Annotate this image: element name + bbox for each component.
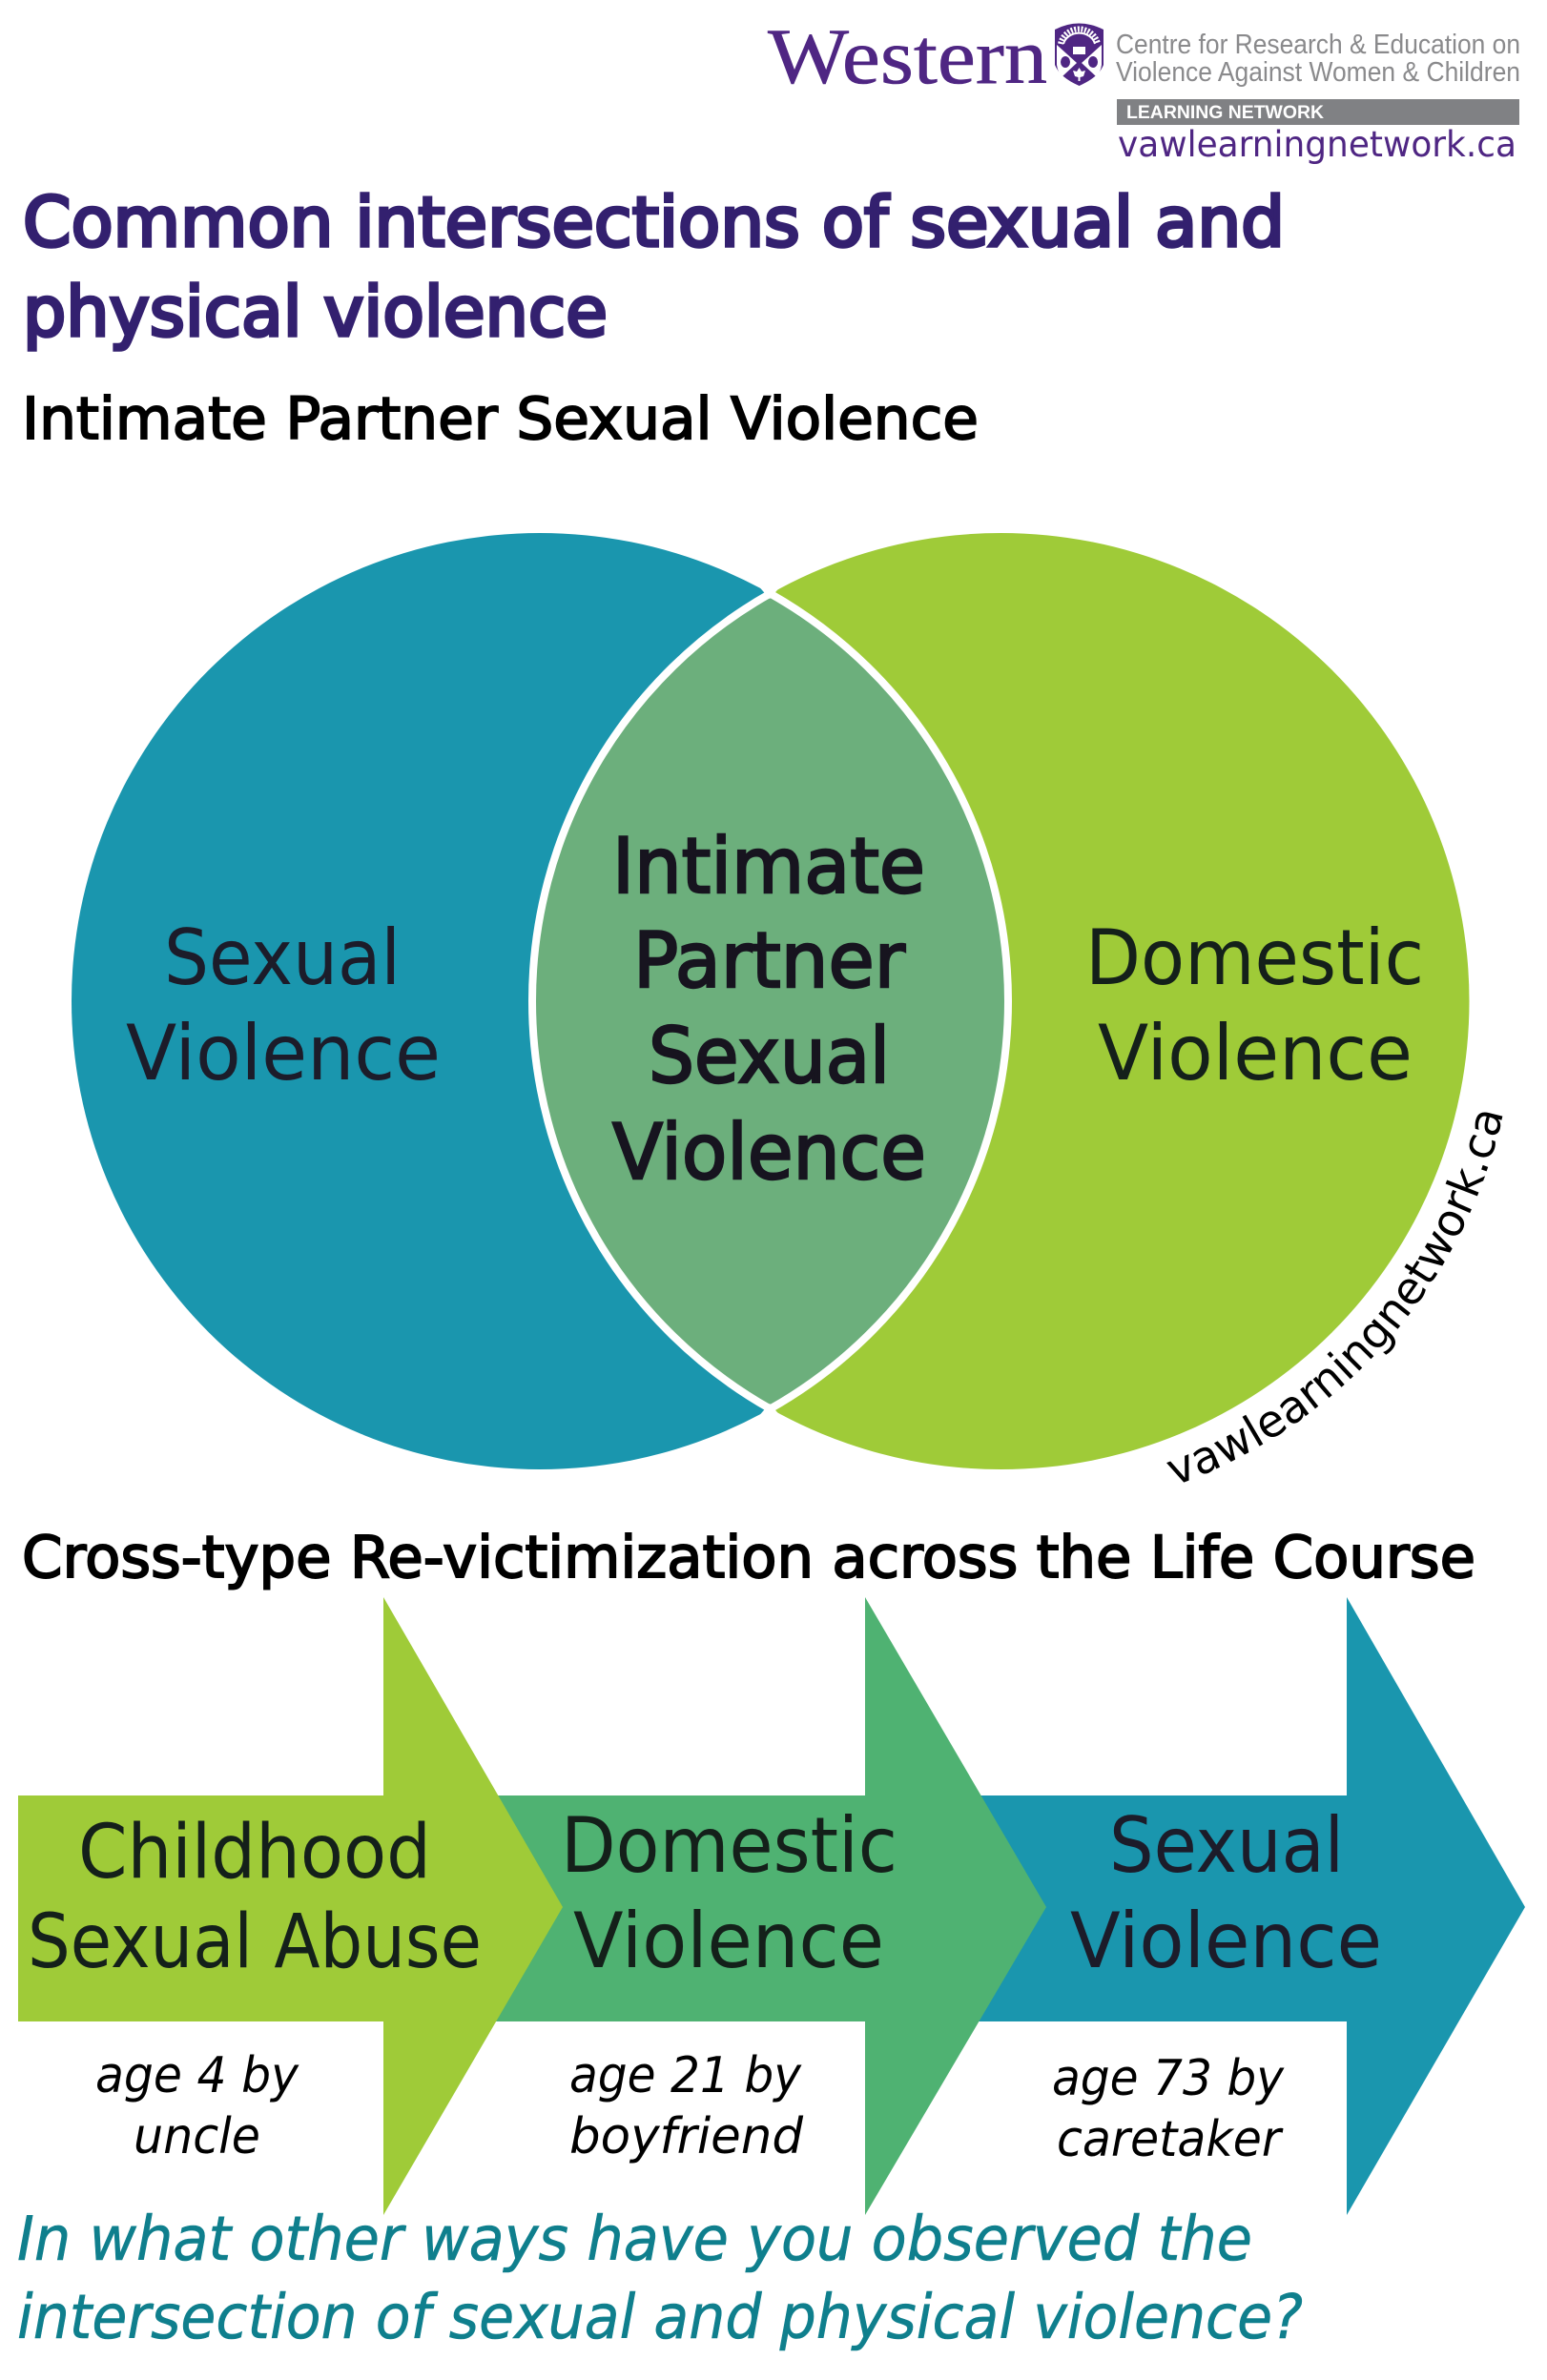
website link: vawlearningnetwork.ca	[1118, 124, 1516, 165]
closing question	[17, 2205, 1303, 2353]
title: Common intersections of sexual and	[23, 182, 1285, 262]
label: domestic violence	[1085, 913, 1424, 1098]
label: overlap	[612, 822, 926, 1197]
label: childhood sexual abuse: Childhood	[78, 1810, 431, 1896]
grey bar: learning network: LEARNING NETWORK	[1126, 103, 1324, 123]
label: overlap: Partner	[633, 916, 905, 1005]
label: overlap: Sexual	[649, 1012, 890, 1100]
heading: intimate partner sexual violence: Intimate Partner Sexual Violence	[22, 385, 979, 453]
caption: age 73: caretaker	[1057, 2111, 1284, 2168]
caption: age 21	[569, 2047, 804, 2165]
label: domestic violence: Domestic	[561, 1801, 897, 1890]
label: sexual violence: Sexual	[164, 913, 401, 1002]
caption: age 21: age 21 by	[569, 2047, 802, 2104]
label: sexual violence	[126, 913, 441, 1098]
label: childhood sexual abuse: Sexual Abuse	[28, 1899, 482, 1985]
arrow chain	[18, 1597, 1525, 2215]
label: childhood sexual abuse	[28, 1810, 482, 1985]
caption: age 21: boyfriend	[569, 2108, 804, 2165]
overlap: intimate partner sexual violence	[532, 593, 1008, 1409]
label: sexual violence: Violence	[1070, 1897, 1382, 1985]
grey bar: learning network	[1117, 99, 1519, 125]
heading: cross-type re-victimization: Cross-type Re-victimization across the Life Course	[22, 1524, 1475, 1591]
label: sexual violence: Sexual	[1109, 1801, 1344, 1890]
title: physical violence	[23, 272, 608, 352]
label: domestic violence: Violence	[573, 1897, 884, 1985]
organisation name: Centre for Research & Education on	[1116, 30, 1520, 60]
label: sexual violence: Violence	[126, 1009, 441, 1098]
closing question: In what other ways have you observed the	[17, 2205, 1252, 2275]
caption: age 4	[95, 2047, 299, 2165]
venn diagram	[72, 533, 1469, 1469]
label: domestic violence: Violence	[1098, 1009, 1413, 1098]
label: overlap: Violence	[612, 1108, 926, 1197]
curved website watermark: vawlearningnetwork.ca	[1166, 1112, 1503, 1483]
label: sexual violence	[1070, 1801, 1382, 1985]
arrow: sexual violence	[954, 1597, 1525, 2215]
wordmark: Western: Western	[768, 12, 1047, 100]
junction gap: top	[756, 568, 783, 599]
label: overlap: Intimate	[612, 822, 925, 911]
caption: age 4: age 4 by	[95, 2047, 299, 2104]
icon: university shield	[1055, 23, 1104, 86]
arrow: domestic violence	[477, 1597, 1046, 2215]
circle: sexual violence	[72, 533, 1008, 1469]
circle: domestic violence	[532, 533, 1469, 1469]
organisation name	[1116, 30, 1520, 88]
organisation name: Violence Against Women & Children	[1116, 57, 1520, 88]
label: domestic violence	[561, 1801, 897, 1985]
closing question: intersection of sexual and physical violence?	[17, 2283, 1303, 2353]
arrow: childhood sexual abuse	[18, 1597, 563, 2215]
caption: age 73	[1052, 2050, 1285, 2168]
title	[23, 182, 1285, 352]
caption: age 73: age 73 by	[1052, 2050, 1285, 2107]
header logo block	[768, 12, 1520, 165]
label: domestic violence: Domestic	[1085, 913, 1424, 1002]
junction gap: bottom	[756, 1404, 783, 1434]
caption: age 4: uncle	[134, 2108, 260, 2165]
